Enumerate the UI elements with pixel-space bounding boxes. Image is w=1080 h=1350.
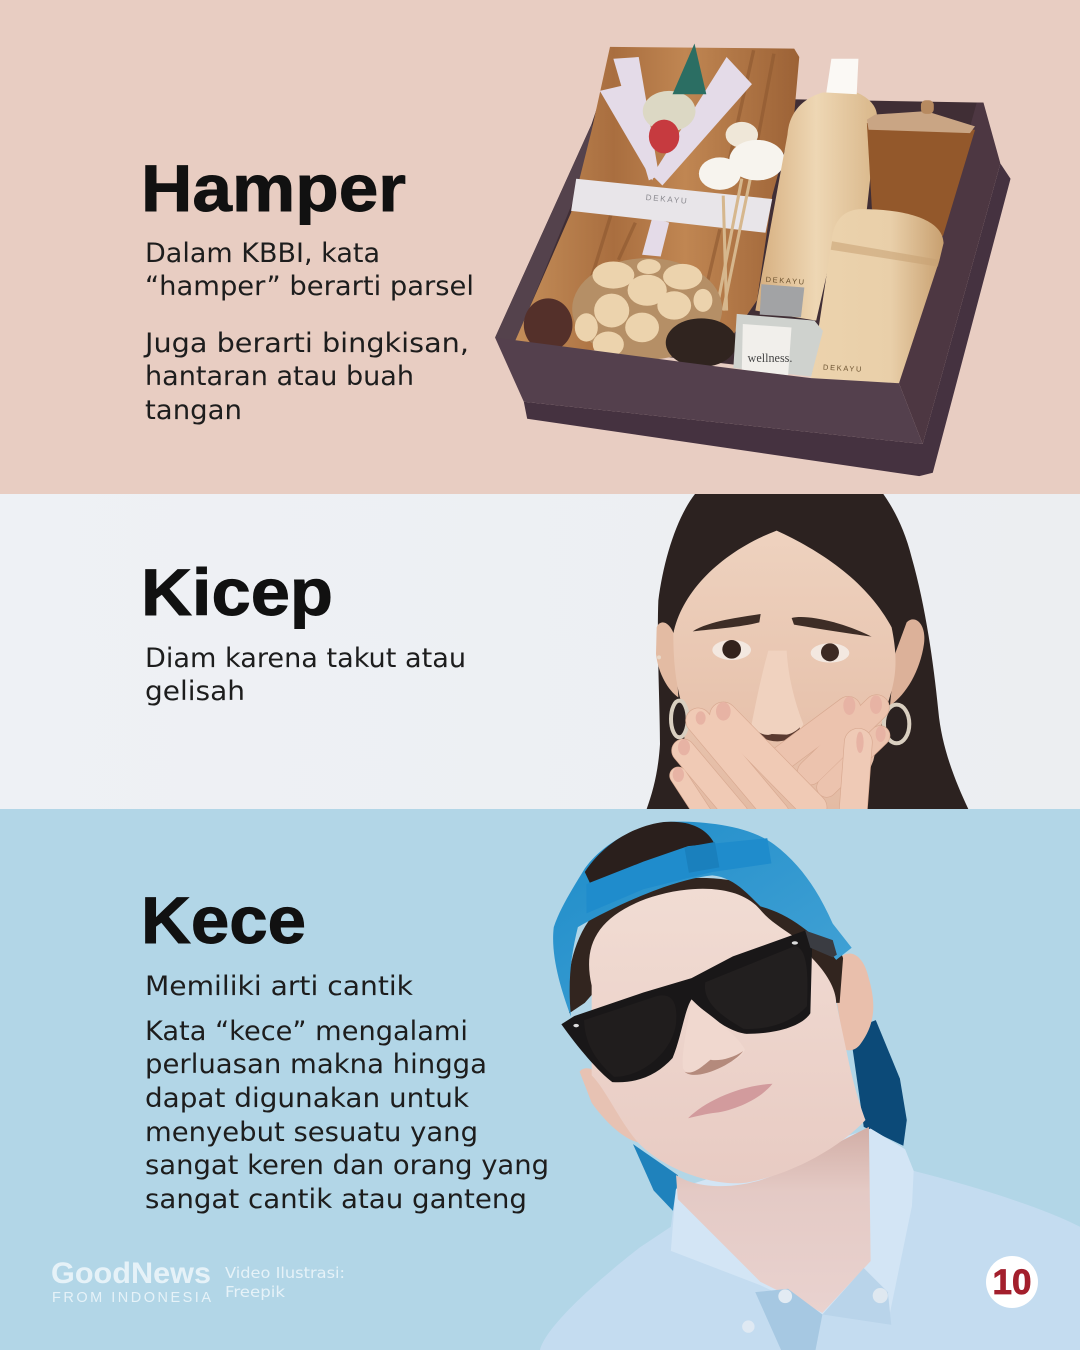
text block: hamper synonyms: tangan xyxy=(145,395,242,426)
text block: kicep definition xyxy=(145,643,466,707)
text block: kece explanation xyxy=(145,1016,549,1215)
text block: kece explanation: sangat keren dan orang yang xyxy=(145,1150,549,1181)
heading: Kece: Kece xyxy=(141,883,306,957)
text block: hamper synonyms: Juga berarti bingkisan, xyxy=(143,328,469,359)
heading: Hamper: Hamper xyxy=(141,151,406,225)
text block: kece explanation: sangat cantik atau ganteng xyxy=(145,1184,527,1215)
image: hamper gift box: DEKAYU xyxy=(823,363,863,374)
text block: kece explanation: dapat digunakan untuk xyxy=(145,1083,469,1114)
text block: kece explanation: perluasan makna hingga xyxy=(145,1049,487,1080)
logo: GoodNews from Indonesia: FROM INDONESIA xyxy=(52,1290,211,1306)
image: hamper gift box: DEKAYU xyxy=(765,275,806,287)
text block: kece explanation: Kata “kece” mengalami xyxy=(145,1016,468,1047)
page number badge xyxy=(986,1256,1038,1308)
panel: kece xyxy=(0,809,1080,1350)
heading: Kicep: Kicep xyxy=(141,555,333,629)
text block: hamper synonyms: hantaran atau buah xyxy=(145,361,414,392)
text block: kece definition: Memiliki arti cantik xyxy=(145,971,413,1002)
text block: kicep definition: gelisah xyxy=(145,676,245,707)
credit: video illustration xyxy=(225,1264,345,1301)
logo: GoodNews from Indonesia xyxy=(51,1257,211,1306)
logo: GoodNews from Indonesia: GoodNews xyxy=(51,1257,211,1290)
text block: kece explanation: menyebut sesuatu yang xyxy=(145,1117,478,1148)
page number badge: 10 xyxy=(993,1263,1031,1302)
text block: hamper definition: Dalam KBBI, kata xyxy=(145,238,380,269)
text block: hamper synonyms xyxy=(143,328,469,426)
credit: video illustration: Freepik xyxy=(225,1283,285,1301)
text block: kicep definition: Diam karena takut atau xyxy=(145,643,466,674)
image: hamper gift box: wellness. xyxy=(748,351,792,365)
image: hamper gift box xyxy=(495,44,1011,476)
text block: hamper definition: “hamper” berarti parsel xyxy=(145,271,474,302)
panel: hamper xyxy=(0,0,1080,494)
panel: kicep xyxy=(0,494,1080,814)
text block: hamper definition xyxy=(145,238,474,302)
image: man with cap and sunglasses xyxy=(540,822,1080,1350)
credit: video illustration: Video Ilustrasi: xyxy=(225,1264,345,1282)
image: worried woman covering mouth xyxy=(647,494,968,814)
image: hamper gift box: DEKAYU xyxy=(645,193,689,206)
